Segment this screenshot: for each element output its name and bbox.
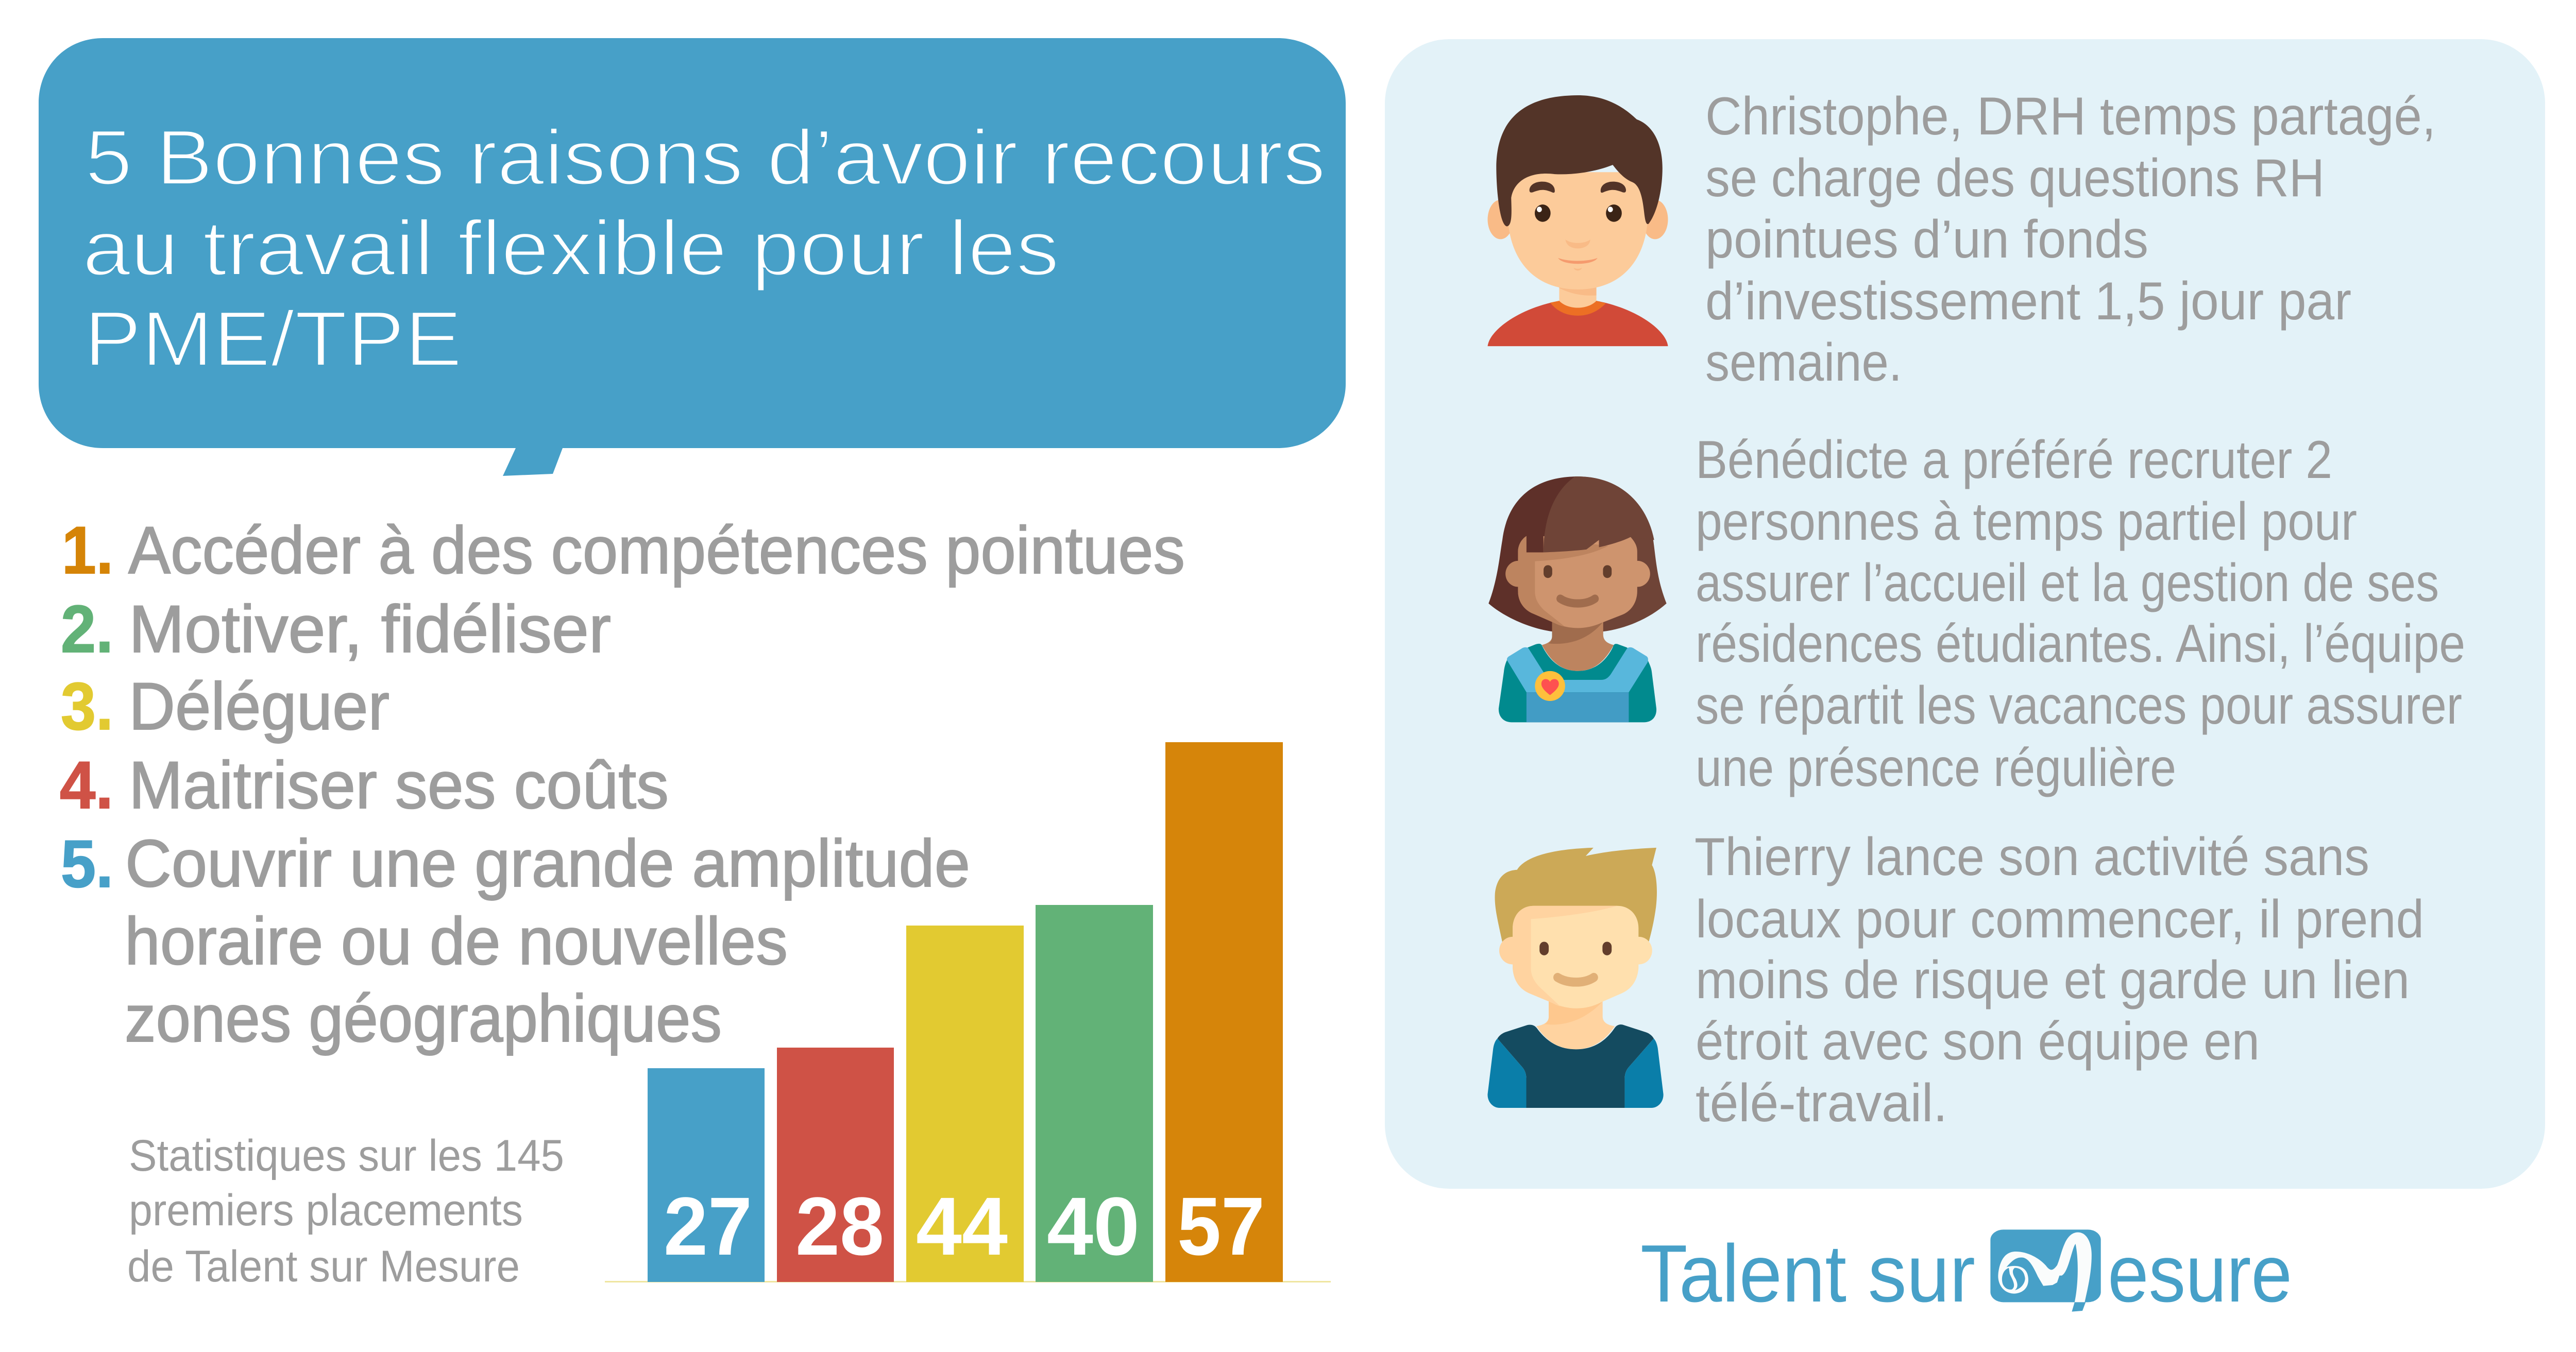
statistics caption bbox=[127, 1131, 564, 1291]
reason 5: 5. bbox=[61, 826, 113, 901]
numbered list of reasons bbox=[60, 512, 1185, 1056]
text: Thierry: locaux pour commencer, il prend bbox=[1696, 889, 2424, 949]
bar chart bbox=[605, 742, 1331, 1282]
bar 40: 40 bbox=[1047, 1180, 1140, 1272]
text: Bénédicte: une présence régulière bbox=[1696, 738, 2176, 798]
reason 5: zones géographiques bbox=[125, 981, 722, 1056]
reason 3: Déléguer bbox=[129, 669, 389, 744]
text: Christophe: pointues d’un fonds bbox=[1705, 210, 2148, 269]
text: Thierry bbox=[1694, 827, 2424, 1133]
reason 5: Couvrir une grande amplitude bbox=[125, 826, 970, 901]
text: Christophe: Christophe, DRH temps partagé, bbox=[1705, 87, 2436, 146]
text: Thierry: Thierry lance son activité sans bbox=[1694, 827, 2369, 887]
title: PME/TPE bbox=[84, 295, 462, 383]
bar 27: 27 bbox=[664, 1180, 752, 1272]
text: Christophe: se charge des questions RH bbox=[1705, 148, 2325, 208]
logo: Talent sur Mesure bbox=[1640, 1228, 2292, 1319]
text: Christophe: semaine. bbox=[1705, 333, 1902, 392]
icon: Christophe avatar bbox=[1487, 95, 1668, 346]
title bbox=[82, 114, 1326, 383]
title speech bubble bbox=[39, 38, 1346, 476]
reason 3: 3. bbox=[61, 669, 113, 744]
text: Thierry: étroit avec son équipe en bbox=[1696, 1012, 2260, 1071]
bar 40 bbox=[1036, 905, 1153, 1282]
logo wordmark bbox=[1640, 1228, 2292, 1319]
bar 28 bbox=[777, 1048, 894, 1282]
text: Christophe bbox=[1705, 87, 2436, 392]
text: Thierry: moins de risque et garde un lien bbox=[1696, 950, 2410, 1010]
logo wordmark: esure bbox=[2108, 1228, 2292, 1319]
bar 44: 44 bbox=[916, 1180, 1008, 1272]
bar 44 bbox=[906, 926, 1024, 1282]
text: Bénédicte: personnes à temps partiel pour bbox=[1696, 492, 2357, 552]
text: Bénédicte: résidences étudiantes. Ainsi, l’équipe bbox=[1696, 614, 2465, 674]
reason 5: horaire ou de nouvelles bbox=[125, 903, 788, 979]
reason 4: Maitriser ses coûts bbox=[129, 747, 669, 823]
reason 2: Motiver, fidéliser bbox=[129, 591, 611, 666]
bar 28: 28 bbox=[795, 1180, 884, 1272]
panel: testimonials bbox=[1385, 39, 2545, 1189]
icon: Thierry avatar bbox=[1487, 848, 1664, 1108]
text: Bénédicte: assurer l’accueil et la gestion de ses bbox=[1696, 553, 2439, 613]
statistics caption: Statistiques sur les 145 bbox=[129, 1131, 564, 1180]
bar 27 bbox=[648, 1068, 765, 1282]
text: Bénédicte: Bénédicte a préféré recruter 2 bbox=[1696, 430, 2332, 490]
reason 2: 2. bbox=[61, 591, 113, 666]
text: Bénédicte bbox=[1696, 430, 2465, 798]
text: Thierry: télé-travail. bbox=[1696, 1073, 1947, 1133]
text: Bénédicte: se répartit les vacances pour assurer bbox=[1696, 676, 2462, 735]
bubble shape bbox=[39, 38, 1346, 476]
statistics caption: premiers placements bbox=[129, 1186, 523, 1235]
title: 5 Bonnes raisons d’avoir recours bbox=[85, 114, 1326, 201]
title: au travail flexible pour les bbox=[82, 204, 1059, 292]
logo icon bbox=[1990, 1229, 2101, 1312]
reason 1: Accéder à des compétences pointues bbox=[128, 512, 1185, 588]
icon: Bénédicte avatar bbox=[1488, 476, 1667, 722]
text: Christophe: d’investissement 1,5 jour par bbox=[1705, 271, 2351, 331]
reason 5 bbox=[61, 826, 970, 1056]
reason 4: 4. bbox=[60, 747, 113, 823]
bar 57: 57 bbox=[1177, 1180, 1265, 1272]
reason 1: 1. bbox=[62, 512, 113, 588]
statistics caption: de Talent sur Mesure bbox=[127, 1242, 520, 1291]
logo wordmark: Talent sur bbox=[1640, 1228, 1975, 1319]
bar 57 bbox=[1165, 742, 1283, 1282]
